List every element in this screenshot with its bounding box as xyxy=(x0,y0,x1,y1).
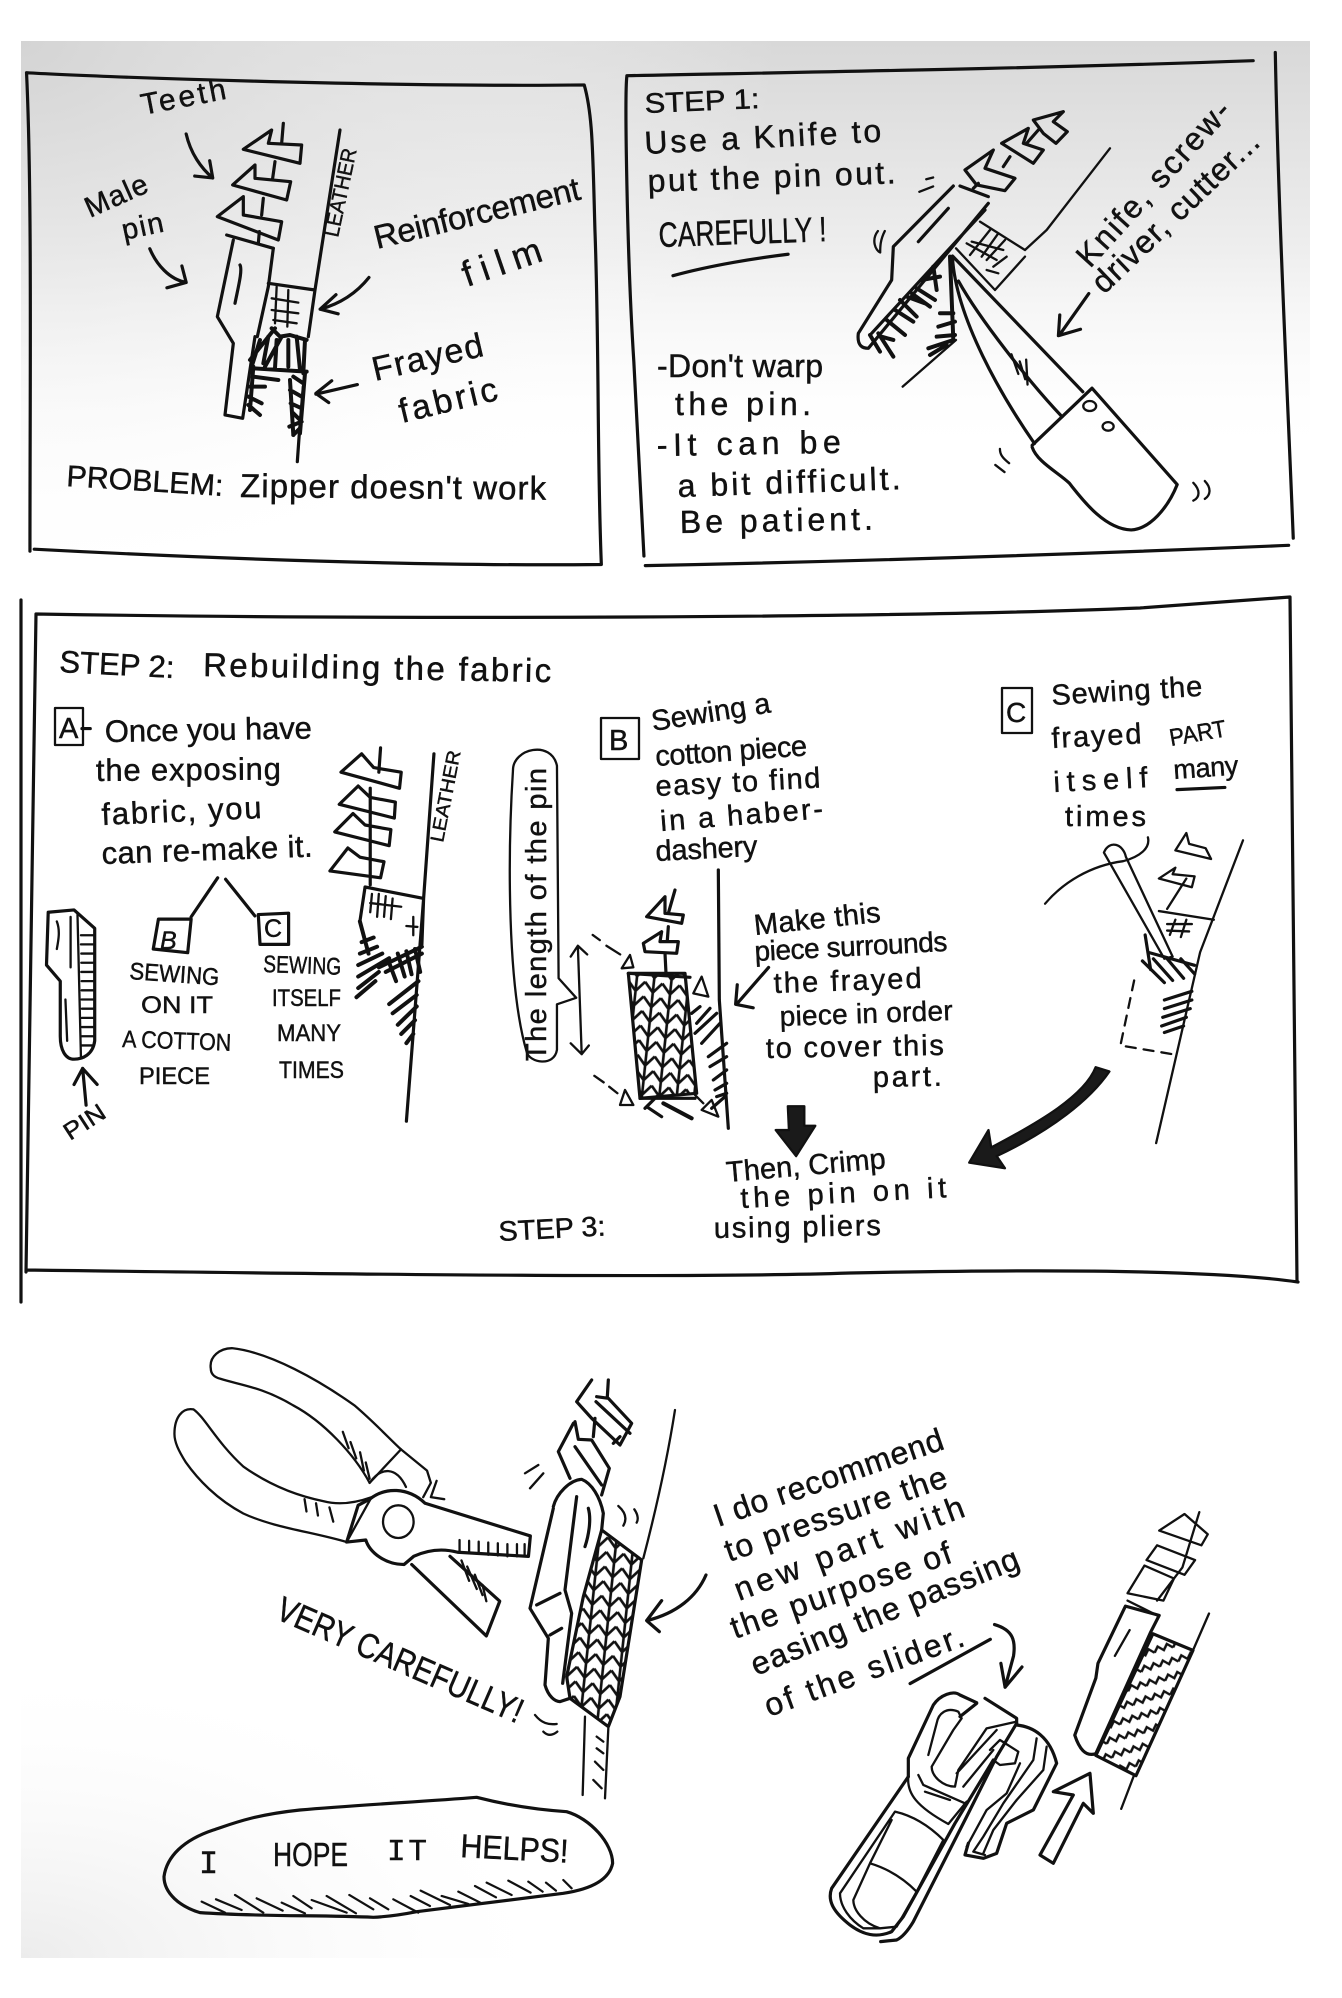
panel frame: problem xyxy=(27,73,601,565)
double arrow: length xyxy=(571,946,589,1054)
sewing needle diagram xyxy=(1045,833,1243,1143)
label: Teeth: Teeth xyxy=(138,73,229,122)
arrow: knife label xyxy=(1058,294,1089,336)
step 1 instructions: CAREFULLY ! xyxy=(658,210,827,255)
note: surround the frayed piece: Make this xyxy=(752,897,882,942)
knife xyxy=(874,177,1210,530)
note: recommendation: new part with xyxy=(729,1489,969,1608)
step 1 warnings: -Don't warp xyxy=(657,348,823,384)
box: B: B xyxy=(609,725,628,757)
step 1 warnings: the pin. xyxy=(675,386,811,422)
callout bubble: length of the pin: The length of the pin xyxy=(521,768,553,1061)
text: very carefully: VERY CAREFULLY! xyxy=(271,1590,529,1731)
speech bubble: I hope it helps: I xyxy=(199,1846,218,1883)
heading: step 2: STEP 2: xyxy=(59,644,175,685)
note: surround the frayed piece: part. xyxy=(873,1061,942,1094)
crimp instruction xyxy=(714,1143,947,1245)
box: B xyxy=(601,718,639,759)
icon: pliers xyxy=(174,1348,530,1636)
arrow: male pin xyxy=(150,249,186,288)
caption: problem xyxy=(66,460,547,507)
option C text xyxy=(263,951,344,1084)
label: Frayed fabric: Frayed xyxy=(368,326,487,389)
option C text: ITSELF xyxy=(272,985,341,1012)
sub-step C text: times xyxy=(1065,801,1146,833)
sub-step C text xyxy=(1050,671,1240,833)
label: Reinforcement film xyxy=(370,170,584,295)
sub-step B text: dashery xyxy=(655,831,759,868)
icon: zipper slider xyxy=(830,1693,1057,1942)
option letters: B xyxy=(160,927,177,955)
step 1 warnings xyxy=(656,348,901,540)
box: A xyxy=(55,708,83,745)
note: surround the frayed piece: piece in order xyxy=(779,995,953,1032)
option B text xyxy=(122,958,232,1090)
underline: many xyxy=(1177,787,1225,790)
step 1 instructions xyxy=(643,83,896,255)
speech bubble: I hope it helps: HOPE xyxy=(273,1836,348,1873)
label: Reinforcement film: film xyxy=(456,229,547,295)
note: recommendation xyxy=(709,1421,1024,1724)
sub-step A text: the exposing xyxy=(96,751,281,788)
option C text: SEWING xyxy=(263,951,342,981)
note: surround the frayed piece: the frayed xyxy=(773,963,922,1000)
arrow: slider direction xyxy=(1040,1773,1093,1863)
panel frame: step 2 xyxy=(26,597,1298,1282)
sub-step B text: cotton piece xyxy=(654,730,808,773)
sub-step A text: fabric, you xyxy=(101,790,262,832)
zipper diagram A xyxy=(330,748,434,1121)
label: Male pin: pin xyxy=(119,207,167,247)
step 1 warnings: Be patient. xyxy=(679,501,873,540)
page edge line xyxy=(19,600,23,1302)
note: surround the frayed piece xyxy=(752,897,953,1094)
label: Male pin: Male xyxy=(80,168,153,224)
step 1 warnings: -It can be xyxy=(656,424,841,463)
underline and arrow: slider xyxy=(910,1625,1022,1687)
panel: step 1 xyxy=(626,52,1293,566)
thick curved arrow xyxy=(969,1067,1109,1168)
arrow: reinforcement film xyxy=(320,277,369,314)
note: surround the frayed piece: piece surrounds xyxy=(754,926,948,967)
note: recommendation: to pressure the xyxy=(720,1459,952,1569)
box: C xyxy=(1002,688,1032,733)
panel: step 2 xyxy=(26,597,1298,1282)
option C text: TIMES xyxy=(279,1057,344,1084)
sub-step A text: can re-make it. xyxy=(101,829,313,871)
sub-step C text: frayed xyxy=(1051,718,1142,755)
step 1 warnings: a bit difficult. xyxy=(677,460,901,504)
note: recommendation: the purpose of xyxy=(725,1535,956,1646)
arrow: to new part xyxy=(647,1575,706,1632)
label: LEATHER: LEATHER xyxy=(427,749,466,844)
step 1 instructions: STEP 1: xyxy=(644,83,760,119)
sub-step B text: Sewing a xyxy=(649,687,773,738)
sub-step B text: easy to find xyxy=(655,762,821,803)
arrow: frayed fabric xyxy=(316,381,357,403)
arrow: surrounds xyxy=(736,967,769,1008)
arrow: teeth xyxy=(186,134,213,178)
crimp instruction: using pliers xyxy=(714,1210,881,1245)
sub-step A text: Once you have xyxy=(105,710,312,749)
box: A: A xyxy=(59,713,79,745)
panel frame: step 1 xyxy=(626,52,1293,566)
option B text: ON IT xyxy=(141,992,213,1019)
sub-step C text: many xyxy=(1172,750,1240,785)
label: Frayed fabric: fabric xyxy=(395,370,501,431)
guide dashes: cotton piece xyxy=(593,935,620,1093)
sub-step B text: in a haber- xyxy=(659,793,824,838)
note: recommendation: I do recommend xyxy=(709,1421,948,1534)
sub-step C text: Sewing the xyxy=(1050,671,1203,712)
sub-step C text: itself xyxy=(1053,762,1149,799)
note: recommendation: easing the passing xyxy=(745,1540,1024,1682)
arrow and label: PIN: PIN xyxy=(59,1099,111,1146)
zipper being opened xyxy=(858,112,1110,387)
option C text: MANY xyxy=(277,1020,341,1047)
crimp instruction: the pin on it xyxy=(740,1172,947,1215)
arrow and label: PIN xyxy=(59,1068,111,1146)
note: recommendation: of the slider. xyxy=(759,1618,969,1724)
panel: problem xyxy=(27,73,601,565)
sub-step B text xyxy=(649,687,824,868)
option B text: PIECE xyxy=(139,1063,210,1090)
caption: problem: Zipper doesn't work xyxy=(240,467,547,507)
finished pin with zigzag patch xyxy=(1075,1512,1209,1809)
speech bubble: I hope it helps: HELPS! xyxy=(460,1827,569,1870)
step 3 label: STEP 3: xyxy=(498,1210,606,1247)
sub-step C text: PART xyxy=(1167,715,1228,752)
step 1 instructions: Use a Knife to xyxy=(643,113,882,161)
box: C: C xyxy=(1006,697,1026,728)
sub-step A text xyxy=(96,710,313,871)
speech bubble: I hope it helps: IT xyxy=(387,1835,427,1870)
label: LEATHER: LEATHER xyxy=(320,146,362,239)
heading: step 2: Rebuilding the fabric xyxy=(203,646,551,689)
zipper diagram: frayed pin xyxy=(217,123,340,462)
label: knife, screwdriver, cutter: Knife, screw- xyxy=(1069,93,1238,274)
crimped pin with knit patch xyxy=(525,1380,675,1798)
note: surround the frayed piece: to cover this xyxy=(766,1030,944,1065)
label: Frayed fabric xyxy=(368,326,501,431)
thick arrow: down xyxy=(776,1106,815,1156)
label: knife, screwdriver, cutter: driver, cutter... xyxy=(1084,123,1266,300)
option B text: A COTTON xyxy=(122,1026,232,1057)
cotton piece diagram xyxy=(620,870,728,1128)
callout bubble: length of the pin xyxy=(510,750,576,1062)
option letters xyxy=(160,915,282,955)
step 1 instructions: put the pin out. xyxy=(647,154,896,199)
label: Reinforcement film: Reinforcement xyxy=(370,170,584,256)
icon: zipper pin xyxy=(46,910,95,1059)
option B text: SEWING xyxy=(129,958,220,991)
connector lines and option boxes xyxy=(82,729,289,953)
section: crimping with pliers xyxy=(174,1348,706,1798)
crimp instruction: Then, Crimp xyxy=(725,1143,887,1189)
caption: problem: PROBLEM: xyxy=(66,460,224,503)
underline: carefully xyxy=(673,254,788,276)
heading: step 2 xyxy=(59,644,551,689)
speech bubble: I hope it helps xyxy=(164,1797,613,1917)
label: Male pin xyxy=(80,168,167,247)
option letters: C xyxy=(264,915,282,943)
